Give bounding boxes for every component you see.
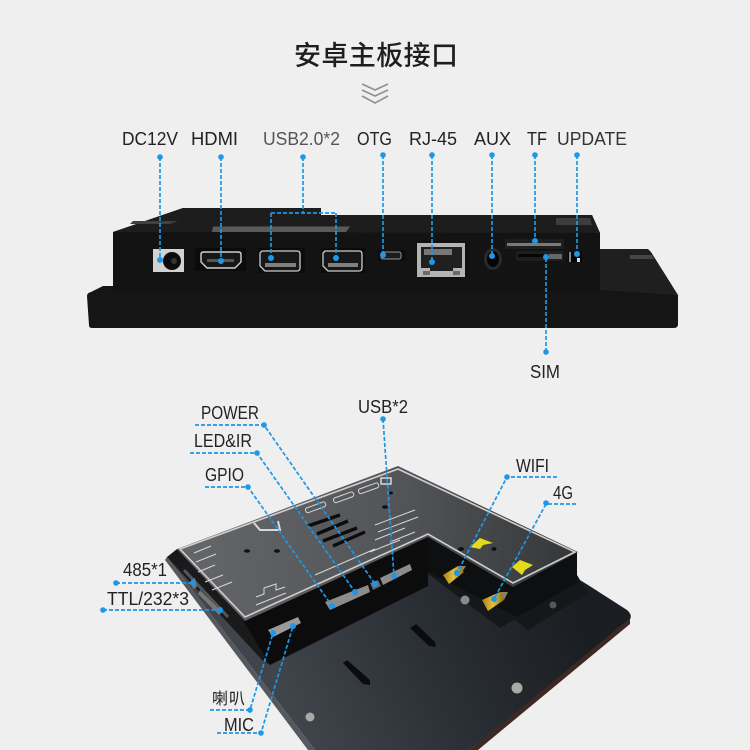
module front wall	[243, 535, 428, 665]
bracket	[427, 555, 588, 630]
label: TTL/232*3: TTL/232*3	[107, 589, 189, 609]
label: DC12V: DC12V	[122, 129, 178, 149]
right wall	[428, 535, 577, 617]
device: top side view	[87, 208, 678, 328]
connectors: speaker and mic	[268, 617, 301, 637]
label: GPIO: GPIO	[205, 465, 244, 485]
base panel front	[87, 286, 678, 328]
port: USB 1	[258, 248, 305, 273]
label: USB2.0*2: USB2.0*2	[263, 129, 340, 149]
callouts: bottom labels	[107, 397, 573, 735]
icon: double chevron	[362, 84, 388, 103]
plate slots	[343, 624, 436, 685]
connector: POWER	[370, 580, 381, 590]
module top surface	[177, 466, 578, 621]
label: UPDATE: UPDATE	[557, 129, 627, 149]
plate screws	[306, 682, 522, 722]
module holes	[244, 492, 496, 553]
label: speaker: 喇叭	[212, 690, 245, 708]
connector: GPIO and LED	[325, 585, 370, 610]
label: 4G: 4G	[553, 483, 573, 503]
label: HDMI: HDMI	[191, 129, 238, 149]
label: AUX: AUX	[474, 129, 511, 149]
label: SIM: SIM	[530, 362, 560, 382]
label: OTG: OTG	[357, 129, 392, 149]
port: update button	[568, 252, 582, 262]
title: 安卓主板接口	[294, 34, 458, 73]
port: AUX	[484, 248, 502, 270]
vent slots	[308, 515, 365, 546]
callout lines: bottom device	[100, 416, 576, 736]
device: bottom perspective view	[165, 466, 631, 750]
antenna connectors	[443, 566, 508, 611]
label: TF: TF	[527, 129, 547, 149]
top lid highlight	[113, 208, 600, 233]
label: LED&IR: LED&IR	[194, 431, 252, 451]
back plate	[167, 470, 631, 750]
label: RJ-45: RJ-45	[409, 129, 457, 149]
callouts: top row labels	[122, 129, 627, 382]
base panel top surface	[600, 249, 678, 295]
callout lines: top device	[157, 152, 580, 355]
device body	[113, 208, 600, 291]
port: HDMI	[195, 248, 246, 271]
port: TF slot	[505, 239, 564, 249]
port: OTG	[378, 250, 406, 261]
plate edge	[470, 618, 630, 750]
module side left	[167, 549, 270, 665]
port: RJ-45	[416, 241, 468, 279]
port: USB 2	[321, 248, 365, 273]
printed labels on module	[194, 478, 418, 605]
connector: USB	[380, 564, 412, 585]
label: USB*2: USB*2	[358, 397, 408, 417]
port: SIM slot	[516, 251, 563, 261]
label: WIFI: WIFI	[516, 456, 549, 476]
side ports	[191, 578, 222, 615]
label: 485*1: 485*1	[123, 560, 167, 580]
label: POWER: POWER	[201, 403, 259, 423]
yellow stickers	[470, 538, 533, 575]
label: MIC: MIC	[224, 715, 254, 735]
port: DC jack	[153, 249, 184, 272]
